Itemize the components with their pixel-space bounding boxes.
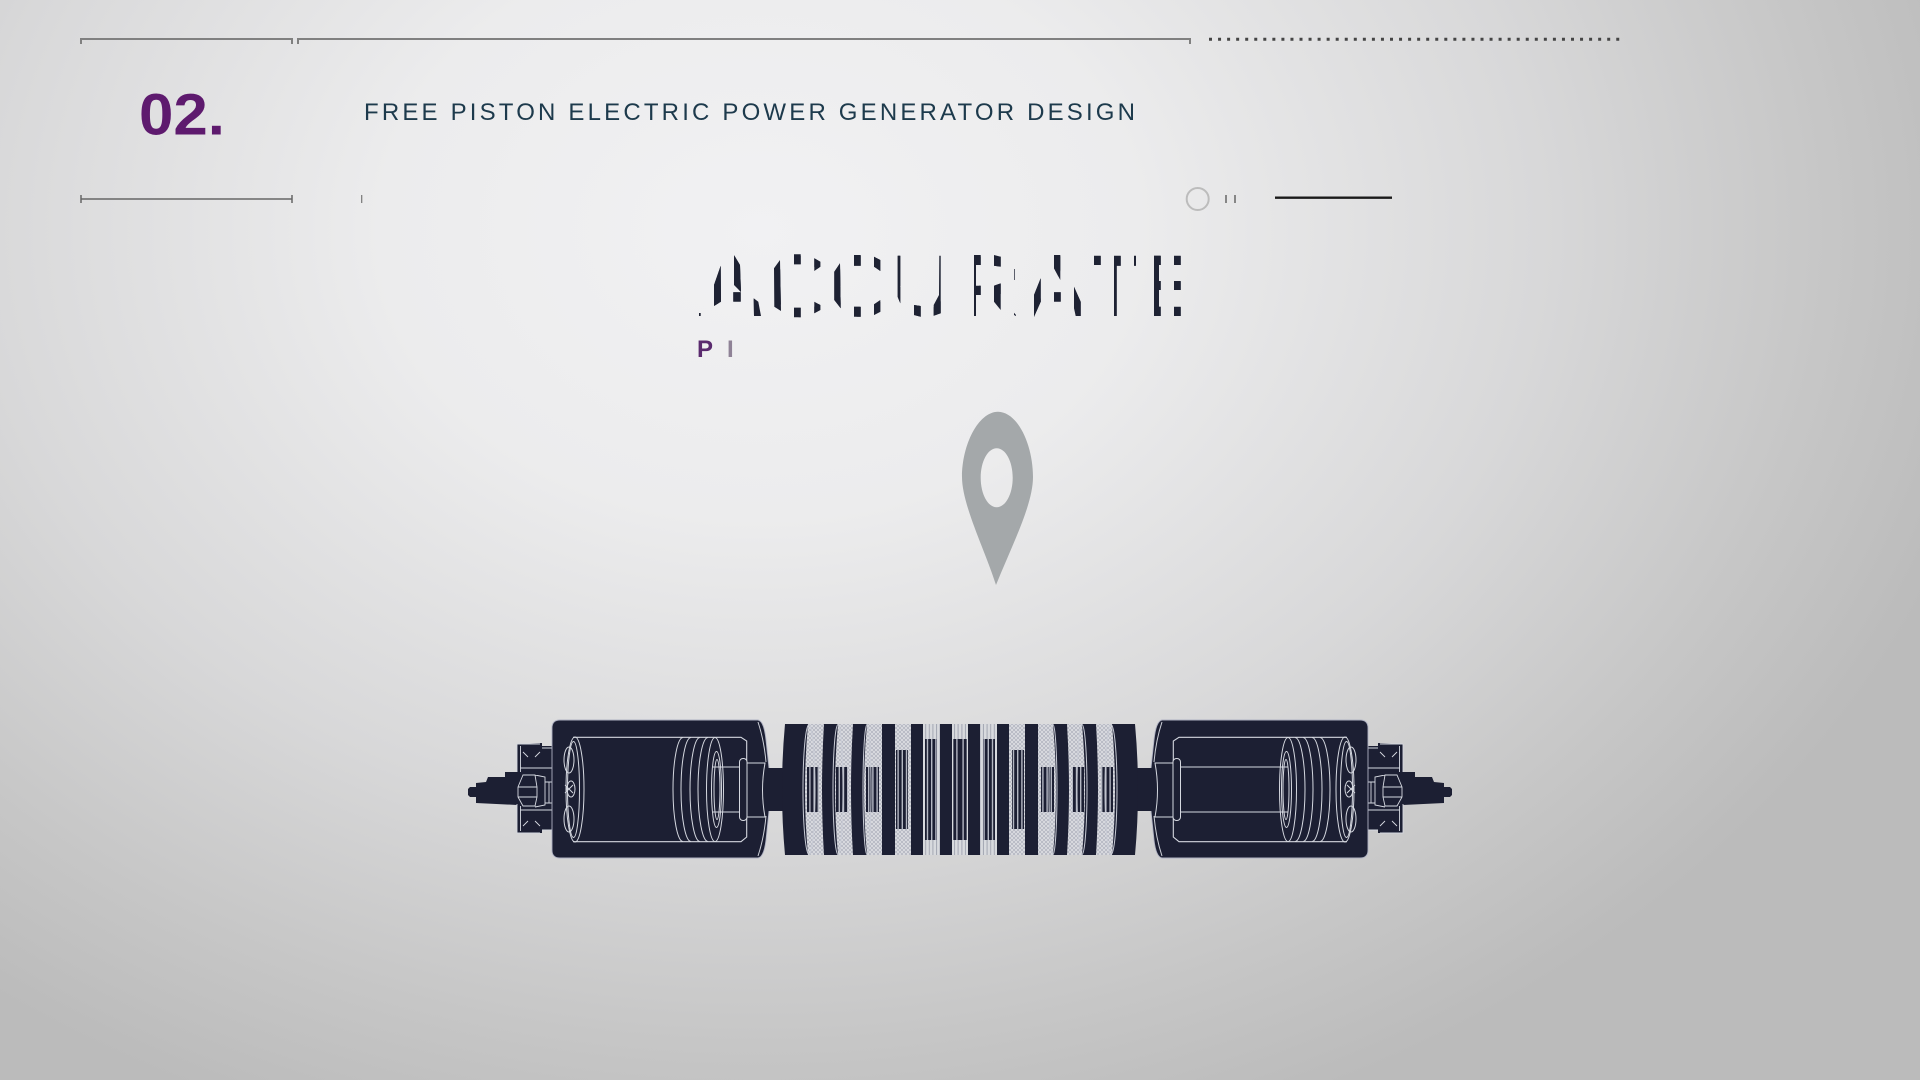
dotted header rule <box>1209 38 1622 41</box>
end assembly left <box>468 743 565 833</box>
progress indicator <box>1187 188 1392 210</box>
coil ring outlines left <box>803 724 871 854</box>
coil dark bands left <box>782 724 952 855</box>
free piston generator diagram <box>468 720 1452 858</box>
section number: 02. <box>139 82 225 148</box>
piston rings left <box>673 738 724 842</box>
piston rod right <box>1181 767 1288 812</box>
icon: location pin <box>962 412 1033 585</box>
subtitle: partially revealed letters: P <box>697 336 713 363</box>
right half of generator (mirrored) <box>960 720 1452 858</box>
subtitle: partially revealed letters: I <box>727 336 734 363</box>
header frame lines <box>81 39 1190 203</box>
coil gaps left <box>805 724 960 855</box>
piston head end caps <box>564 737 584 842</box>
section heading: FREE PISTON ELECTRIC POWER GENERATOR DESIGN <box>364 99 1135 126</box>
left half of generator <box>468 720 960 858</box>
piston rings right <box>1280 738 1330 842</box>
piston rod left <box>713 767 740 812</box>
collar <box>740 758 783 820</box>
cylinder outline left <box>573 737 747 842</box>
subtitle: partially revealed letters <box>697 336 734 363</box>
housing left <box>552 720 769 858</box>
title: partially revealed ACCURATE: ACCURATE <box>699 237 1211 336</box>
